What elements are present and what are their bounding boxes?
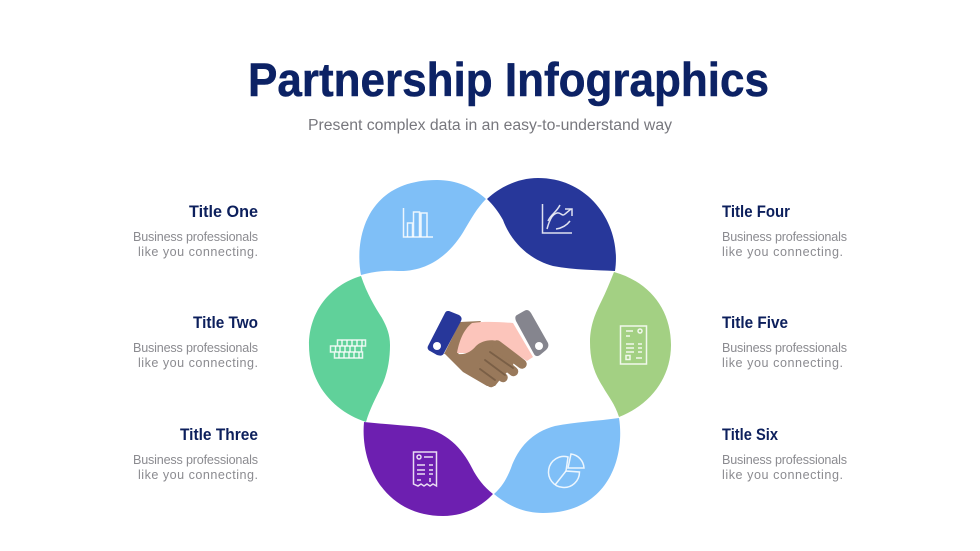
petal: navy top right — [487, 178, 616, 271]
icon: growth chart — [542, 204, 572, 233]
right text: title five — [722, 314, 847, 370]
petal: light blue bottom right — [494, 418, 620, 513]
left text: title one: like you connecting. — [138, 245, 258, 259]
left text: title three: Business professionals — [133, 453, 258, 467]
left text: title one: Title One — [189, 203, 258, 221]
petal: light blue top left — [359, 180, 486, 275]
finger lines — [480, 352, 513, 380]
light hand — [457, 322, 533, 361]
petal: mint green left — [309, 276, 390, 422]
navy cuff — [428, 311, 462, 356]
dark hand palm — [445, 340, 516, 386]
right text: title six: Business professionals — [722, 453, 847, 467]
grey cuff button — [535, 342, 543, 350]
right text: title six: like you connecting. — [722, 468, 843, 482]
grey cuff — [515, 310, 548, 356]
left text: title three: Title Three — [180, 426, 258, 444]
right text: title six — [722, 426, 847, 482]
left text: title two — [133, 314, 258, 370]
icon: receipt — [414, 452, 436, 486]
petal: sage green right — [590, 272, 671, 417]
petal: purple bottom left — [364, 422, 493, 516]
icon: wall of bricks — [330, 340, 366, 358]
left text: title three — [133, 426, 258, 482]
subtitle: Present complex data in an easy-to-understand way — [308, 117, 672, 134]
left text: title two: like you connecting. — [138, 356, 258, 370]
right text: title five: Business professionals — [722, 341, 847, 355]
left text: title three: like you connecting. — [138, 468, 258, 482]
icon: bar chart — [404, 208, 433, 237]
icon: document — [620, 326, 646, 364]
right text: title four — [722, 203, 847, 259]
navy cuff button — [433, 342, 441, 350]
right text: title four: like you connecting. — [722, 245, 843, 259]
right text: title five: Title Five — [722, 314, 788, 332]
right text: title six: Title Six — [722, 426, 779, 444]
title: Partnership Infographics — [248, 53, 769, 106]
right text: title four: Title Four — [722, 203, 791, 221]
right text: title four: Business professionals — [722, 230, 847, 244]
dark hand fingers — [477, 345, 522, 382]
right text: title five: like you connecting. — [722, 356, 843, 370]
left text: title two: Title Two — [193, 314, 258, 332]
icon: handshake — [428, 310, 548, 386]
left text: title one — [133, 203, 258, 259]
left text: title one: Business professionals — [133, 230, 258, 244]
dark hand sleeve side — [444, 321, 481, 354]
icon: pie chart — [548, 454, 584, 487]
left text: title two: Business professionals — [133, 341, 258, 355]
